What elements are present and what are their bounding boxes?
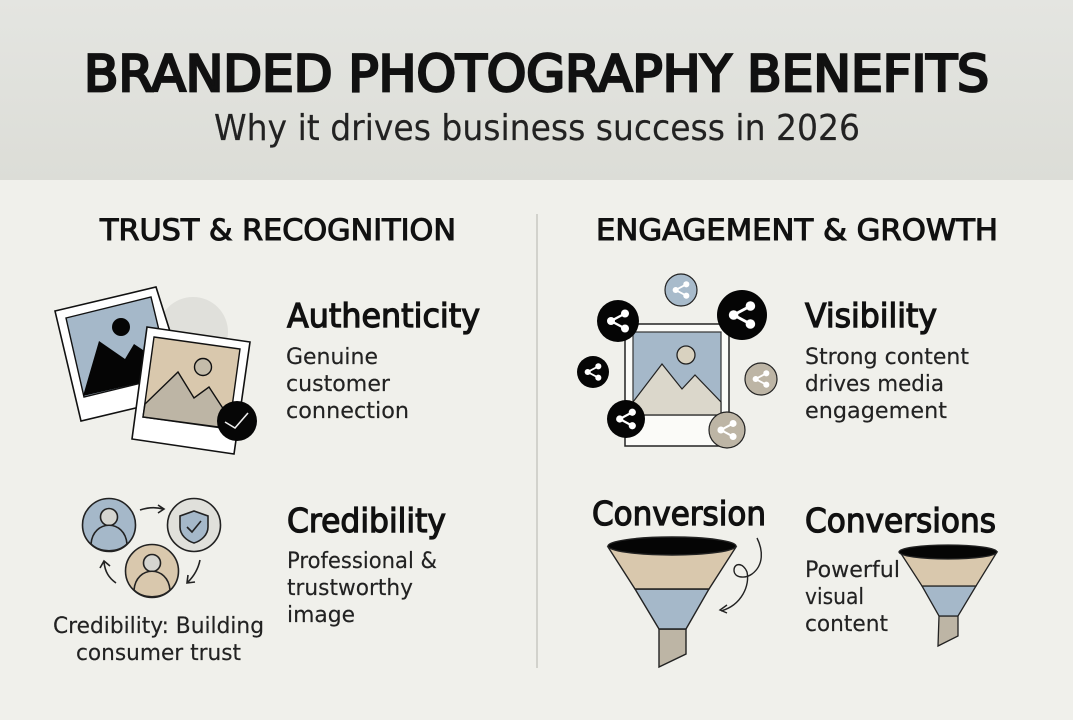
icon: small funnel <box>899 545 997 646</box>
section heading: trust and recognition: TRUST & RECOGNITION <box>99 213 456 247</box>
caption: credibility building consumer trust: consumer trust <box>76 641 241 666</box>
caption: credibility building consumer trust <box>53 614 264 666</box>
icon: large funnel with looping arrow <box>608 537 761 667</box>
text: visibility <box>805 296 969 424</box>
text: visibility: drives media <box>805 372 944 397</box>
text: credibility: Professional & <box>287 549 437 574</box>
heading: conversion: Conversion <box>592 494 766 533</box>
icon: overlapping photos with check <box>55 287 257 454</box>
text: credibility: Credibility <box>287 501 446 540</box>
text: conversions <box>805 501 996 637</box>
text: authenticity: Genuine <box>286 345 378 370</box>
header band <box>0 0 1073 180</box>
text: credibility: image <box>287 603 355 628</box>
title: BRANDED PHOTOGRAPHY BENEFITS <box>84 45 989 103</box>
text: conversions: visual <box>805 585 864 610</box>
text: credibility <box>287 501 446 628</box>
icon: trust cycle <box>82 498 220 598</box>
subtitle: Why it drives business success in 2026 <box>214 108 860 149</box>
text: visibility: engagement <box>805 399 947 424</box>
caption: credibility building consumer trust: Credibility: Building <box>53 614 264 639</box>
text: conversions: Conversions <box>805 501 996 540</box>
text: visibility: Visibility <box>805 296 937 335</box>
section heading: engagement and growth: ENGAGEMENT & GROWTH <box>596 213 998 247</box>
icon: photo with share badges <box>577 274 777 448</box>
text: authenticity <box>286 296 480 424</box>
text: credibility: trustworthy <box>287 576 413 601</box>
text: conversions: Powerful <box>805 558 900 583</box>
text: authenticity: customer <box>286 372 391 397</box>
text: authenticity: Authenticity <box>287 296 480 335</box>
text: authenticity: connection <box>286 399 409 424</box>
text: visibility: Strong content <box>805 345 969 370</box>
text: conversions: content <box>805 612 888 637</box>
